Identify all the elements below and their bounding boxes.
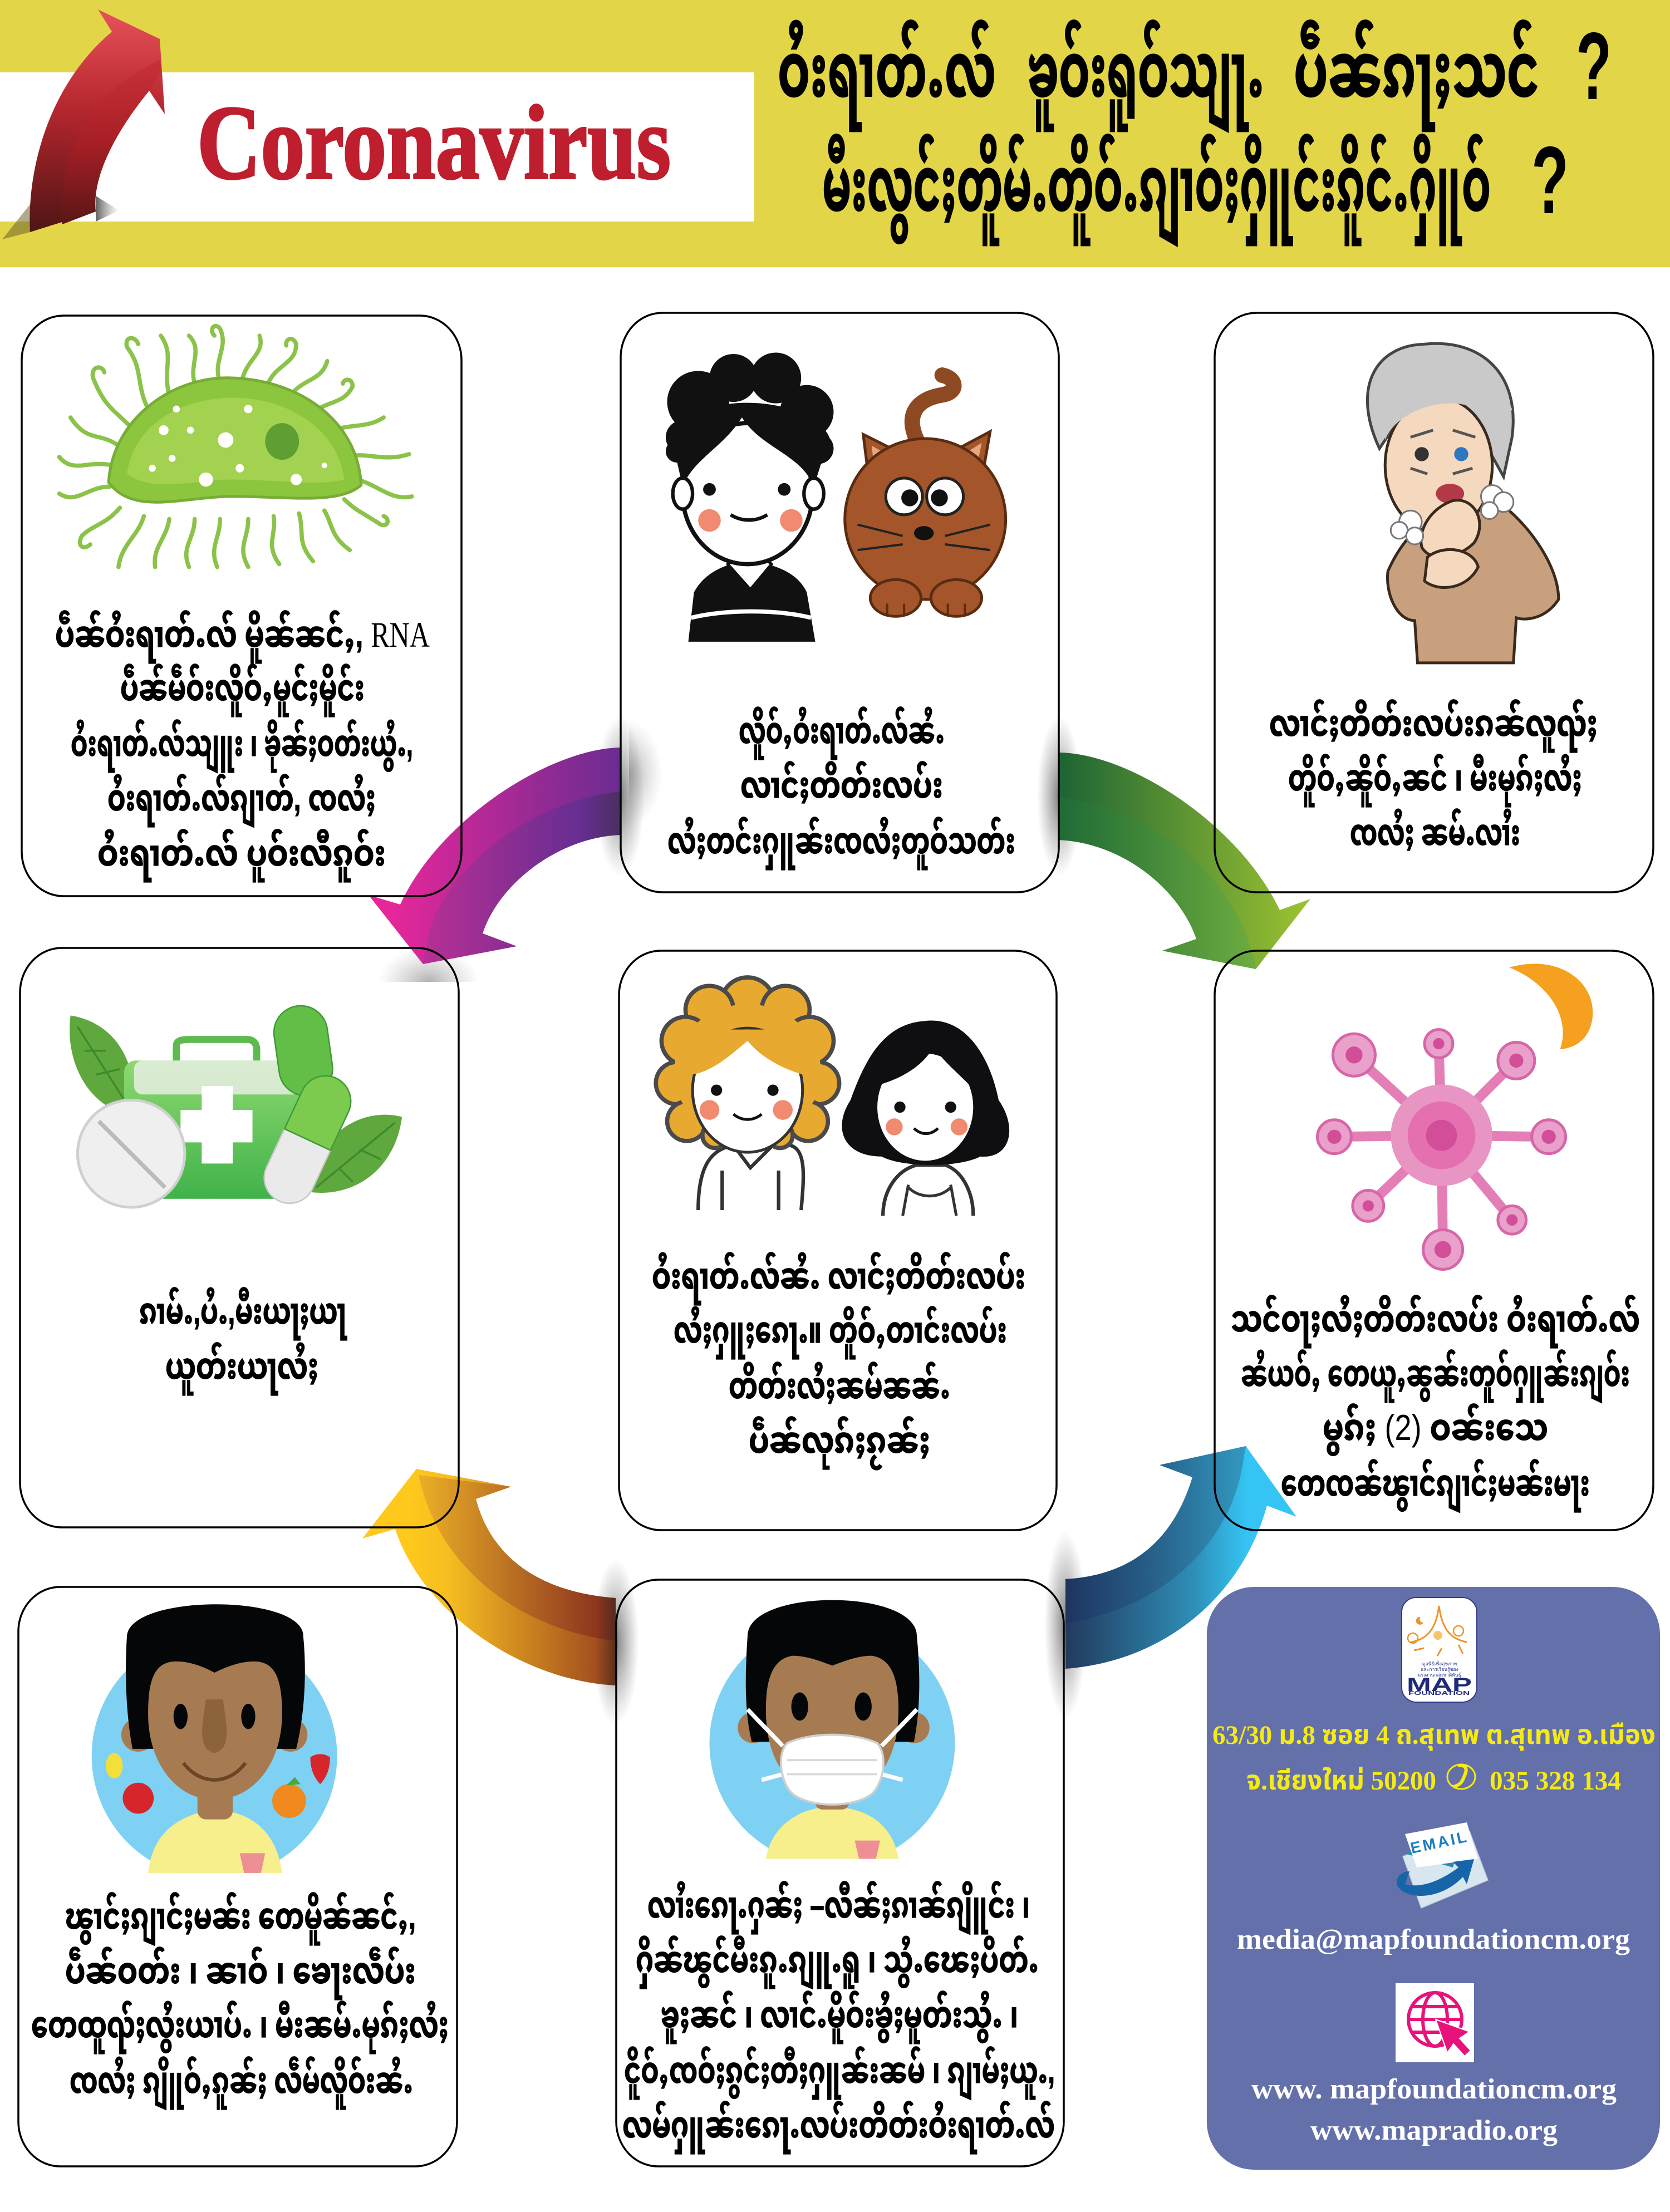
- text: panel 6: [1231, 1295, 1640, 1513]
- panel: person to person: [619, 951, 1057, 1530]
- text: panel 8: ငိူဝ်ႇၸဝ်ႈၵွင်ႈတီႈႁူၼ်းၼမ် ၊ ၵျၢမ်ႈယူႉ,: [624, 2046, 1055, 2100]
- icon: MAP Foundation logo: FOUNDATION: [1408, 1690, 1470, 1697]
- icon: boy with fruit: [92, 1604, 337, 1879]
- text: websites: www. mapfoundationcm.org: [1251, 2073, 1617, 2105]
- text: panel 1: ဝႆးရၢတ်ႉလ်သျူး ၊ ၶိုၼ်ႈဝတ်းယွႆႉ,: [71, 719, 413, 773]
- text: panel 8: လမ်ႁူၼ်းၵေႃႉလပ်းတိတ်းဝႆးရၢတ်ႉလ်: [622, 2101, 1055, 2154]
- icon: two women: [656, 977, 1009, 1216]
- text: panel 4: ယူတ်းယႃလႆႈ: [165, 1342, 318, 1395]
- panel: contact details: [1207, 1587, 1660, 2170]
- text: panel 1: ပဵၼ်မဵဝ်းလိူဝ်ႇမူင်ႈမိူင်း: [120, 663, 365, 717]
- text: panel 5: [652, 1252, 1025, 1470]
- panel: what the virus is: [22, 316, 461, 896]
- text: panel 2: လႆႈတင်းႁူၼ်းၸလႆႈတူဝ်သတ်း: [667, 817, 1015, 870]
- panel: incubation: [1215, 951, 1653, 1530]
- panel: treatment: [20, 948, 459, 1527]
- icon: email envelope: [1397, 1822, 1488, 1908]
- text: address: 63/30 ม.8 ซอย 4 ถ.สุเทพ ต.สุเทพ อ.เมือง: [1212, 1721, 1656, 1751]
- text: panel 7: ၸလႆႈ ၵျိူဝ်ႇၵူၼ်ႈ လဵမ်လိူဝ်းၼႆႉ: [70, 2056, 413, 2110]
- text: panel 8: လၢႆးၵေႃႉႁၼ်ႈ –လီၼ်ႈၵၢၼ်ၵျိူင်း ၊: [647, 1881, 1030, 1935]
- arrow: green: [1037, 715, 1310, 969]
- text: panel 7: ၽွၢင်ႈၵျၢင်ႈမၼ်း တေမိူၼ်ၼင်ႇ,: [65, 1892, 416, 1946]
- icon: medical kit with pills and leaves: [70, 1002, 402, 1212]
- icon: boy with face mask: [710, 1600, 955, 1866]
- text: panel 4: [139, 1287, 347, 1395]
- heading: Shan question lines: ?: [1531, 127, 1569, 234]
- text: panel 5: တိတ်းလႆႈၼမ်ၼၼ်ႉ: [729, 1361, 950, 1406]
- panel: animal source: [621, 313, 1059, 892]
- icon: boy and cat: [666, 352, 1006, 642]
- icon: MAP Foundation logo: และการเรียนรู้ของ: [1421, 1667, 1458, 1673]
- panel: prevention: [616, 1580, 1064, 2166]
- text: panel 5: ဝႆးရၢတ်ႉလ်ၼႆႉ လၢင်ႈတိတ်းလပ်း: [652, 1252, 1025, 1305]
- icon: email envelope: EMAIL: [1409, 1828, 1468, 1857]
- heading: Shan question lines: [778, 13, 1612, 247]
- icon: MAP Foundation logo: มูลนิธิเพื่อสุขภาพ: [1422, 1660, 1457, 1667]
- text: email: media@mapfoundationcm.org: [1237, 1924, 1630, 1955]
- icon: MAP Foundation logo: [1402, 1597, 1477, 1702]
- text: panel 3: [1269, 699, 1598, 853]
- arrow: purple: [369, 715, 662, 1016]
- text: panel 7: [31, 1892, 449, 2110]
- text: panel 7: ပဵၼ်ဝတ်း ၊ ၼၢဝ် ၊ ၶေႃးလဵပ်း: [65, 1946, 416, 2000]
- title: Coronavirus: Coronavirus: [197, 85, 671, 201]
- text: panel 8: ႁိၼ်ၽွင်မီးၵူႉၵျူႉရူ ၊ သွႆႉၽေႈပိတ်ႉ: [636, 1935, 1039, 1989]
- text: panel 1: [55, 610, 430, 882]
- icon: green bacterium: [59, 326, 412, 567]
- text: panel 7: တေထူၺ်ႈလွႆးယၢပ်ႉ ၊ မီးၼမ်ႉမုၵ်ႈလႆႈ: [31, 2000, 449, 2054]
- text: panel 3: ၸလႆႈ ၼမ်ႉလၢႆး: [1350, 808, 1520, 853]
- text: panel 2: လၢင်ႈတိတ်းလပ်း: [740, 761, 943, 805]
- text: panel 1: ဝႆးရၢတ်ႉလ်ၵျၢတ်, ၸလႆႈ: [107, 774, 376, 828]
- text: websites: [1251, 2073, 1617, 2146]
- arrow: blue: [1044, 1446, 1296, 1720]
- text: address: 035 328 134: [1490, 1766, 1621, 1796]
- text: panel 8: ၶူႈၼင် ၊ လၢင်ႉမိူဝ်းၶွႆႈမူတ်းသွႆႉ ၊: [661, 1990, 1018, 2044]
- icon: MAP Foundation logo: แรงงานกลุ่มชาติพันธุ์: [1418, 1672, 1461, 1678]
- text: panel 2: လိူဝ်ႇဝႆးရၢတ်ႉလ်ၼႆႉ: [739, 706, 945, 760]
- text: panel 8: [622, 1881, 1055, 2154]
- text: panel 5: ပဵၼ်လုၵ်ႈၵႂၼ်ႈ: [749, 1416, 930, 1470]
- text: panel 5: လႆႈႁူႈၵေႃႉ။ တိူဝ်ႇတၢင်းလပ်း: [674, 1306, 1007, 1359]
- text: panel 1: ဝႆးရၢတ်ႉလ် ပူဝ်းလီၵူဝ်း: [97, 829, 386, 882]
- text: address: [1212, 1721, 1656, 1796]
- text: panel 1: ပဵၼ်ဝႆးရၢတ်ႉလ် မိူၼ်ၼင်ႇ, RNA: [55, 610, 430, 663]
- icon: globe with cursor: [1396, 1983, 1474, 2062]
- panel: symptoms: [18, 1587, 457, 2166]
- text: panel 4: ၵၢမ်ႉ,ပႆႉ,မီးယႃႈယႃ: [139, 1287, 347, 1340]
- text: panel 6: မွၵ်ႈ (2) ဝၼ်းသေ: [1323, 1403, 1548, 1456]
- header band: [0, 0, 1670, 267]
- icon: coughing old man: [1367, 343, 1559, 663]
- heading: Shan question lines: ၶူဝ်းရူဝ်သျႃႉ: [1028, 19, 1264, 132]
- text: websites: www.mapradio.org: [1310, 2115, 1558, 2146]
- heading: Shan question lines: ?: [1576, 13, 1612, 120]
- icon: telephone: [1447, 1764, 1475, 1789]
- text: panel 2: [667, 706, 1015, 870]
- text: address: จ.เชียงใหม่ 50200: [1246, 1766, 1436, 1796]
- panel: how it spreads: [1215, 313, 1653, 892]
- icon: red rising arrow: [2, 9, 165, 239]
- icon: MAP Foundation logo: MAP: [1407, 1674, 1472, 1695]
- heading: Shan question lines: ပဵၼ်ၵႃႈသင်: [1294, 19, 1539, 132]
- arrow: yellow: [362, 1469, 639, 1726]
- icon: pink virus with orange crescent: [1318, 964, 1593, 1269]
- heading: Shan question lines: ဝႆးရၢတ်ႉလ်: [778, 19, 996, 132]
